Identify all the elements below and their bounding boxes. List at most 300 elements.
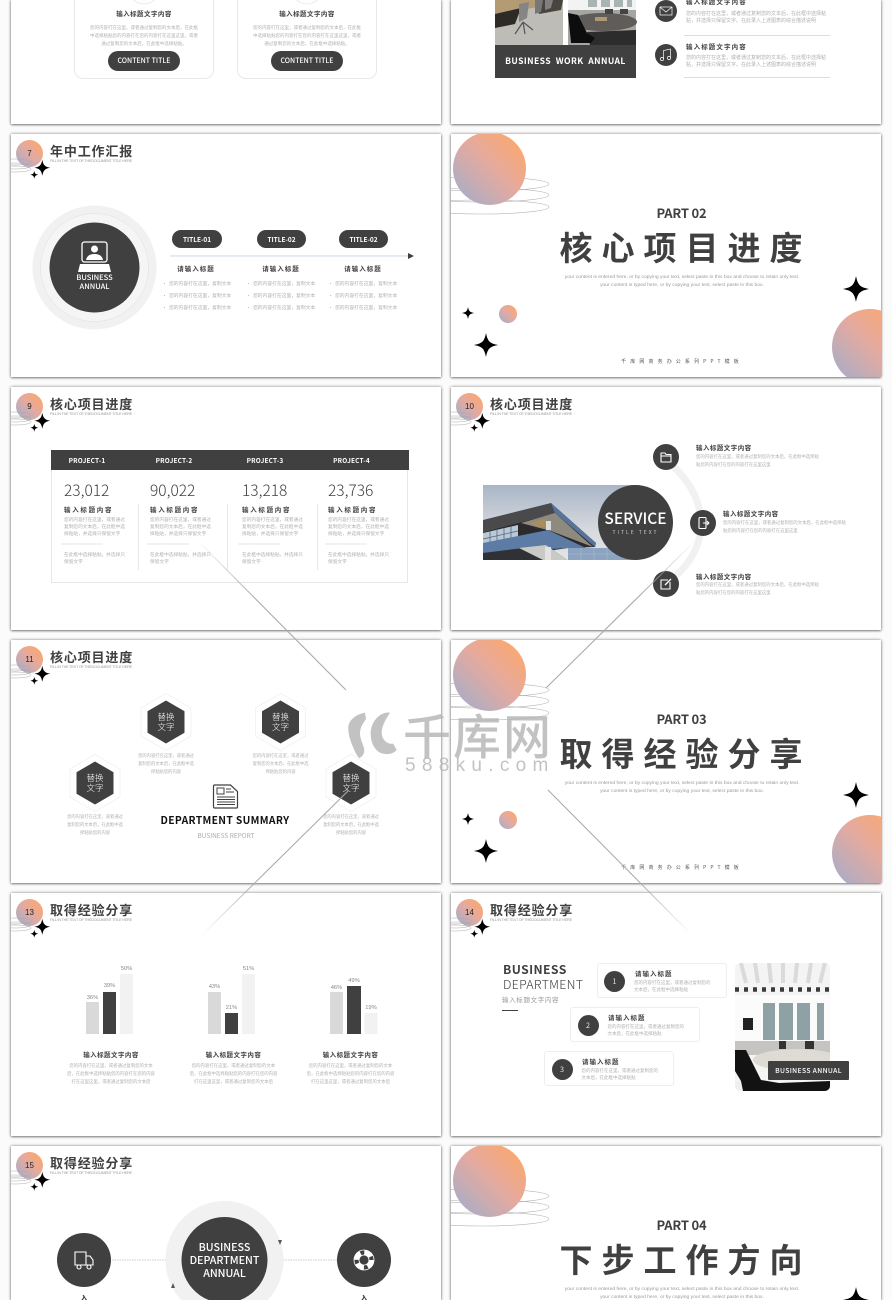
- text block: music body: 您的内容打在这里，或者通过复制您的文本后，在此框中选择粘: [686, 54, 826, 61]
- page number: 9: [27, 402, 32, 411]
- hexagons: [0, 640, 430, 883]
- hex label 3: 替换: [86, 772, 104, 784]
- hex body 1: 择粘贴您的内容: [151, 769, 181, 775]
- column 2 note: 在此框中选择粘贴，并选择只: [150, 552, 211, 558]
- number 3: 3: [560, 1064, 564, 1074]
- card body left: 您的内容打在这里，或者通过复制您的文本后，在此框: [90, 25, 198, 31]
- column 3 body: [242, 516, 303, 536]
- column 2 list: [246, 280, 315, 311]
- part description: [482, 780, 882, 796]
- badge text: [76, 272, 113, 292]
- card 3 body: 您的内容打在这里，或者通过复制您的: [582, 1068, 658, 1074]
- heading: 核心项目进度: [50, 394, 133, 413]
- connectors and center ring: [0, 1190, 430, 1300]
- column 2 body: 您的内容打在这里，或者通过: [150, 516, 211, 522]
- subheading: FILL IN THE TEXT OF THEDOCUMENT TITLE HERE: [50, 159, 132, 163]
- project 3 label: PROJECT-3: [247, 454, 283, 464]
- card 2 title: 请输入标题: [608, 1012, 646, 1022]
- subheading: FILL IN THE TEXT OF THEDOCUMENT TITLE HERE: [490, 918, 572, 922]
- header circle: [16, 140, 43, 167]
- header rings and stars: [11, 640, 61, 690]
- slide 6: work annual (cropped): [451, 0, 881, 124]
- text block: mail body: [686, 10, 826, 24]
- hex body 3: 复制您的文本后，在此框中选: [67, 822, 123, 828]
- business annual badge: [32, 206, 156, 330]
- page number: 11: [25, 655, 34, 664]
- star (cropped): [451, 1146, 881, 1300]
- icon: document: [213, 784, 239, 809]
- number 2: 2: [586, 1020, 590, 1030]
- heading: 核心项目进度: [490, 394, 573, 413]
- banner: business work annual: [495, 45, 636, 78]
- header rings and stars: [451, 412, 490, 432]
- icon: envelope: [655, 0, 677, 22]
- table header bar: [51, 450, 409, 470]
- heading: 年中工作汇报: [50, 141, 133, 160]
- small gradient circle: [499, 305, 517, 323]
- hex body 4: [323, 813, 379, 837]
- bar chart 1: 36%: [87, 995, 98, 1001]
- header: [11, 640, 146, 690]
- chart 1 body: [67, 1062, 155, 1087]
- part description: your content is typed here, or by copying your text, select paste in this box.: [600, 1295, 764, 1300]
- number 1: 1: [612, 976, 617, 986]
- summary title: DEPARTMENT SUMMARY: [161, 812, 289, 827]
- column 2 note: [150, 552, 211, 564]
- column 3 note: [242, 552, 303, 564]
- column 1 list: • 您的内容打在这里，复制文本: [162, 280, 231, 287]
- slide 12: PART 03: [451, 640, 881, 883]
- column 2 list: • 您的内容打在这里，复制文本: [246, 304, 315, 311]
- hex body 4: 您的内容打在这里，或者通过: [323, 814, 379, 820]
- photo: building: [482, 485, 639, 560]
- slide 10: service: [451, 387, 881, 630]
- watermark brand text: 千库网: [403, 698, 553, 768]
- column 3 title: 请输入标题: [344, 262, 382, 272]
- card right: [237, 0, 377, 79]
- column 1 number: 23,012: [64, 479, 109, 501]
- bar chart 3: 19%: [365, 1005, 377, 1011]
- watermark url: 588ku.com: [405, 755, 555, 776]
- column 2 body: 复制您的文本后，在此框中选: [150, 524, 211, 530]
- button left: [108, 51, 180, 71]
- column 2 note: 保留文字: [150, 558, 169, 564]
- hex label 4: 替换: [342, 772, 360, 784]
- item 3 body: 您的内容打在这里，或者通过复制您的文本后，在此框中选择粘: [696, 582, 819, 588]
- column 1 note: 在此框中选择粘贴，并选择只: [64, 552, 125, 558]
- icon: lifebuoy: [337, 1233, 391, 1287]
- chart 3 body: [307, 1062, 394, 1087]
- hex body 3: 您的内容打在这里，或者通过: [67, 814, 123, 820]
- chart 3 body: 您的内容打在这里，或者通过复制您的文本: [309, 1063, 392, 1069]
- column 1 list: • 您的内容打在这里，复制文本: [162, 292, 231, 299]
- pill 3: TITLE-02: [349, 234, 378, 244]
- card 2: [570, 1007, 700, 1042]
- page number: 14: [465, 908, 474, 917]
- card 1 body: [634, 980, 710, 994]
- icon: edit: [653, 571, 679, 597]
- page number: 7: [27, 149, 32, 158]
- big gradient circle: [453, 1144, 526, 1217]
- card body left: 通过复制您的文本后，在此框中选择粘贴。: [101, 41, 187, 47]
- text block: music body: 贴，并选择只保留文字。在此录入上述图表的综合描述说明: [686, 61, 816, 68]
- column 2 body: [150, 516, 211, 536]
- page number: 10: [465, 402, 474, 411]
- column 1 body: 复制您的文本后，在此框中选: [64, 524, 125, 530]
- rings: [451, 640, 561, 730]
- column 3 note: 保留文字: [242, 558, 261, 564]
- page number: 15: [25, 1161, 34, 1170]
- chart 2 title: 输入标题文字内容: [206, 1049, 261, 1059]
- arrow timeline: [170, 253, 414, 259]
- slide 7: 年中工作汇报: [11, 134, 441, 377]
- footer caption: 千库网商务办公系列PPT模板: [621, 864, 743, 871]
- part label: PART 04: [657, 1215, 706, 1234]
- part description: your content is typed here, or by copying your text, select paste in this box.: [600, 283, 764, 288]
- hex label 2: [272, 712, 289, 732]
- column 3 list: • 您的内容打在这里，复制文本: [328, 304, 397, 311]
- pill 1: TITLE-01: [183, 234, 211, 244]
- item 2 body: 贴您的内容打在您的内容打在这里这里: [723, 528, 798, 534]
- column 2 body: 择粘贴，并选择只保留文字: [150, 530, 206, 536]
- divider 1: [684, 35, 830, 36]
- part label: PART 03: [657, 709, 706, 728]
- column 4 body: 复制您的文本后，在此框中选: [328, 524, 389, 530]
- heading: business: BUSINESS: [503, 960, 567, 978]
- service label: SERVICE: [604, 507, 667, 529]
- hex body 1: 您的内容打在这里，或者通过: [138, 753, 194, 759]
- item 1 title: 输入标题文字内容: [696, 442, 752, 452]
- hex label 1: 文字: [157, 720, 175, 732]
- card 2 body: 文本后，在此框中选择粘贴: [608, 1030, 662, 1036]
- header circle: [16, 646, 43, 673]
- hex label 2: 替换: [272, 710, 289, 722]
- slide 11: department summary: [11, 640, 441, 883]
- column 3 note: 在此框中选择粘贴，并选择只: [242, 552, 303, 558]
- hex body 3: [67, 813, 123, 837]
- chart 2 body: 后，在此框中选择粘贴您的内容打在您的内容: [190, 1071, 277, 1077]
- chart 2 body: 打在这里这里，或者通过复制您的文本后: [194, 1079, 273, 1085]
- page number: 13: [25, 908, 34, 917]
- column 3 body: 复制您的文本后，在此框中选: [242, 524, 303, 530]
- banner: business work annual: BUSINESS WORK ANNUAL: [505, 55, 626, 67]
- pill 2: TITLE-02: [267, 234, 296, 244]
- center label: ANNUAL: [203, 1266, 246, 1280]
- hex body 3: 择粘贴您的内容: [80, 830, 110, 836]
- photos: office: [495, 0, 637, 45]
- pill 2: [257, 230, 306, 248]
- accent line: [502, 1010, 518, 1011]
- header rings and stars: [11, 158, 50, 179]
- bar chart 2: 43%: [209, 984, 220, 990]
- header: [11, 893, 146, 943]
- item 2 body: 您的内容打在这里，或者通过复制您的文本后，在此框中选择粘: [723, 520, 846, 526]
- slide 15: process circles (cropped): [11, 1146, 441, 1300]
- hex label 2: 文字: [272, 720, 289, 732]
- pill 3: [339, 230, 388, 248]
- summary subtitle: BUSINESS REPORT: [197, 830, 255, 840]
- part description: your content is entered here, or by copying your text, select paste in this box and choose to retain only text.: [565, 1287, 799, 1292]
- center label: DEPARTMENT: [190, 1252, 259, 1268]
- hex body 2: 择粘贴您的内容: [265, 769, 296, 775]
- icon: phone: [690, 510, 716, 536]
- column 1 title: 请输入标题: [177, 262, 215, 272]
- bar chart 1: 39%: [104, 983, 115, 989]
- card body right: 您的内容打在这里，或者通过复制您的文本后，在此框: [253, 25, 361, 31]
- chart 1 title: 输入标题文字内容: [83, 1049, 139, 1059]
- photo label: [768, 1061, 849, 1080]
- card body right: 中选择粘贴您的内容打在您的内容打在这里这里，或者: [253, 33, 361, 39]
- rings: [451, 177, 550, 214]
- column 3 list: • 您的内容打在这里，复制文本: [328, 292, 397, 299]
- service circle: [598, 485, 673, 560]
- chart 3 body: 打在这里这里，或者通过复制您的文本后: [311, 1079, 390, 1085]
- heading: 取得经验分享: [490, 900, 573, 919]
- hex body 1: 复制您的文本后，在此框中选: [138, 761, 194, 767]
- icon: folder: [653, 444, 679, 470]
- bar chart 3: 49%: [348, 978, 360, 984]
- card body left: 中选择粘贴您的内容打在您的内容打在这里这里，或者: [90, 33, 198, 39]
- hex body 2: 复制您的文本后，在此框中选: [253, 761, 308, 767]
- subheading: FILL IN THE TEXT OF THEDOCUMENT TITLE HERE: [50, 412, 132, 416]
- footer caption: 千库网商务办公系列PPT模板: [621, 358, 743, 365]
- bar chart 3: 46%: [331, 985, 342, 991]
- hex body 1: [138, 752, 194, 776]
- rings: [451, 1146, 561, 1236]
- column 1 list: • 您的内容打在这里，复制文本: [162, 304, 231, 311]
- chart 2 body: [190, 1062, 277, 1087]
- heading: department: DEPARTMENT: [503, 974, 583, 993]
- item 2 title: 输入标题文字内容: [723, 508, 779, 518]
- bar chart 2: [202, 960, 262, 1036]
- badge text: BUSINESS: [76, 272, 113, 283]
- header rings and stars: [11, 412, 50, 432]
- center label: BUSINESS: [199, 1240, 250, 1254]
- slide 5: content cards (cropped): [11, 0, 441, 124]
- badge text: ANNUAL: [80, 281, 109, 292]
- number 1: [604, 970, 625, 992]
- text block: mail body: 贴，并选择只保留文字。在此录入上述图表的综合描述说明: [686, 17, 816, 24]
- number 3: [552, 1058, 572, 1080]
- hex label 3: [86, 772, 104, 792]
- hex label 1: 替换: [157, 710, 175, 722]
- column 1 body: [64, 516, 125, 536]
- heading: 取得经验分享: [50, 1153, 133, 1172]
- column 2 title: 请输入标题: [262, 262, 300, 272]
- hex body 4: 复制您的文本后，在此框中选: [323, 822, 379, 828]
- part description: your content is entered here, or by copying your text, select paste in this box and choose to retain only text.: [565, 781, 799, 786]
- divider 2: [684, 77, 830, 78]
- service sublabel: TITLE TEXT: [613, 528, 658, 536]
- subheading: FILL IN THE TEXT OF THEDOCUMENT TITLE HERE: [50, 918, 132, 922]
- card body right: [253, 24, 361, 47]
- header rings and stars: [11, 893, 61, 943]
- column 1 note: 保留文字: [64, 558, 83, 564]
- card 3 body: 文本后，在此框中选择粘贴: [582, 1074, 636, 1080]
- arc: [671, 465, 703, 578]
- column 1 body: 择粘贴，并选择只保留文字: [64, 530, 120, 536]
- slide 13: bar charts: [11, 893, 441, 1136]
- header: [11, 393, 133, 432]
- part title: 下步工作方向: [560, 1234, 812, 1282]
- hex body 4: 择粘贴您的内容: [336, 830, 366, 836]
- photo label: BUSINESS ANNUAL: [775, 1065, 842, 1075]
- bar chart 2: 21%: [226, 1005, 237, 1011]
- subheading: FILL IN THE TEXT OF THEDOCUMENT TITLE HERE: [490, 412, 572, 416]
- project 2 label: PROJECT-2: [156, 454, 192, 464]
- chart 1 body: 后，在此框中选择粘贴您的内容打在您的内容: [67, 1071, 155, 1077]
- slide 16: PART 04 (cropped): [451, 1146, 881, 1300]
- column 1 title: 输入标题内容: [64, 504, 113, 514]
- column 4 number: 23,736: [328, 479, 373, 501]
- hex body 2: 您的内容打在这里，或者通过: [253, 753, 308, 759]
- hex label 1: [157, 712, 175, 732]
- card 1 body: 您的内容打在这里，或者通过复制您的: [634, 980, 710, 986]
- hex label 3: 文字: [86, 782, 104, 794]
- part description: your content is entered here, or by copying your text, select paste in this box and choose to retain only text.: [565, 275, 799, 280]
- column 2 number: 90,022: [150, 479, 195, 501]
- card 3 title: 请输入标题: [582, 1056, 620, 1066]
- item 1 body: 贴您的内容打在您的内容打在这里这里: [696, 462, 771, 468]
- subheading: FILL IN THE TEXT OF THEDOCUMENT TITLE HERE: [50, 1171, 132, 1175]
- column 3 title: 输入标题内容: [242, 504, 291, 514]
- card body right: 通过复制您的文本后，在此框中选择粘贴。: [264, 41, 350, 47]
- project 4 label: PROJECT-4: [333, 454, 370, 464]
- heading: 核心项目进度: [50, 647, 133, 666]
- column 3 list: • 您的内容打在这里，复制文本: [328, 280, 397, 287]
- subheading: FILL IN THE TEXT OF THEDOCUMENT TITLE HERE: [50, 665, 132, 669]
- watermark logo: [348, 712, 398, 759]
- column 3 body: 您的内容打在这里，或者通过: [242, 516, 303, 522]
- pill 1: [172, 230, 222, 248]
- number 2: [578, 1014, 598, 1036]
- column 2 title: 输入标题内容: [150, 504, 199, 514]
- item 1 body: [696, 454, 819, 468]
- card body left: [90, 24, 198, 47]
- icon arcs on top of cards: [134, 0, 318, 4]
- column 4 note: 在此框中选择粘贴，并选择只: [328, 552, 389, 558]
- small gradient circle: [499, 811, 517, 829]
- column 1 body: 您的内容打在这里，或者通过: [64, 516, 125, 522]
- chart 3 title: 输入标题文字内容: [323, 1049, 378, 1059]
- card 1: [597, 963, 727, 998]
- part description: [482, 1286, 882, 1300]
- slide 14: business department: [451, 893, 881, 1136]
- header circle: [16, 899, 43, 926]
- item 3 title: 输入标题文字内容: [696, 570, 752, 580]
- part description: your content is typed here, or by copying your text, select paste in this box.: [600, 789, 764, 794]
- text block: music body: [686, 54, 826, 68]
- item 3 body: 贴您的内容打在您的内容打在这里这里: [696, 590, 771, 596]
- part description: [564, 274, 799, 288]
- chart 1 body: 打在这里这里，或者通过复制您的文本后: [71, 1079, 151, 1085]
- header rings and stars: [451, 893, 501, 943]
- card 2 body: [608, 1024, 684, 1038]
- column 2 list: • 您的内容打在这里，复制文本: [246, 292, 315, 299]
- hex body 2: [253, 752, 308, 776]
- header circle: [16, 1152, 43, 1179]
- column 2 list: • 您的内容打在这里，复制文本: [246, 280, 315, 287]
- card 3: [544, 1051, 674, 1086]
- bar chart 1: 50%: [121, 966, 132, 972]
- card 1 body: 文本后，在此框中选择粘贴: [634, 986, 688, 992]
- header rings and stars: [11, 1146, 61, 1196]
- column 3 number: 13,218: [242, 479, 287, 501]
- corner gradient circle: [832, 309, 892, 385]
- chart 1 body: 您的内容打在这里，或者通过复制您的文本: [69, 1063, 153, 1069]
- button right: CONTENT TITLE: [280, 56, 333, 66]
- column 1 note: [64, 552, 125, 564]
- item 2 body: [723, 520, 846, 534]
- column 4 note: [328, 552, 389, 564]
- column 1 list: [162, 280, 231, 311]
- stars: [451, 640, 881, 883]
- header circle: [456, 393, 483, 420]
- corner gradient circle: [832, 815, 892, 891]
- column 4 body: 择粘贴，并选择只保留文字: [328, 530, 384, 536]
- item 3 body: [696, 582, 819, 596]
- chart 3 body: 后，在此框中选择粘贴您的内容打在您的内容: [307, 1071, 394, 1077]
- card 1 title: 请输入标题: [635, 968, 672, 978]
- column 4 note: 保留文字: [328, 558, 347, 564]
- stars: [462, 276, 869, 357]
- column dividers: [61, 504, 367, 570]
- card title left: 输入标题文字内容: [116, 8, 172, 18]
- column 3 list: [328, 280, 397, 311]
- project 1 label: PROJECT-1: [69, 454, 105, 464]
- subheading: 输入标题文字内容: [502, 994, 559, 1004]
- part title: 取得经验分享: [560, 728, 812, 776]
- column 3 body: 择粘贴，并选择只保留文字: [242, 530, 298, 536]
- bar chart 3: [324, 960, 384, 1036]
- bar chart 1: [80, 960, 140, 1036]
- card 2 body: 您的内容打在这里，或者通过复制您的: [608, 1024, 684, 1030]
- header: [451, 893, 586, 943]
- item 1 body: 您的内容打在这里，或者通过复制您的文本后，在此框中选择粘: [696, 454, 819, 460]
- button left: CONTENT TITLE: [118, 56, 170, 66]
- icon: truck: [57, 1233, 111, 1287]
- slide 9: project table: [11, 387, 441, 630]
- card title right: 输入标题文字内容: [279, 8, 335, 18]
- part label: PART 02: [657, 203, 706, 222]
- header circle: [16, 393, 43, 420]
- header: [451, 393, 573, 432]
- table frame: [51, 450, 408, 583]
- header: [11, 1146, 146, 1196]
- text block: music title: 输入标题文字内容: [686, 41, 747, 51]
- column 4 title: 输入标题内容: [328, 504, 377, 514]
- hex label 4: 文字: [342, 782, 360, 794]
- heading: 取得经验分享: [50, 900, 133, 919]
- bar chart 2: 51%: [243, 966, 254, 972]
- photo: white meeting room: [735, 963, 830, 1091]
- hex label 4: [342, 772, 360, 792]
- column 4 body: [328, 516, 389, 536]
- chart 2 body: 您的内容打在这里，或者通过复制您的文本: [192, 1063, 275, 1069]
- center label: [190, 1240, 259, 1280]
- button right: [271, 51, 343, 71]
- icon: music: [655, 44, 677, 66]
- part title: 核心项目进度: [560, 222, 812, 270]
- card 3 body: [582, 1068, 658, 1082]
- column 4 body: 您的内容打在这里，或者通过: [328, 516, 389, 522]
- header circle: [456, 899, 483, 926]
- text block: mail body: 您的内容打在这里，或者通过复制您的文本后，在此框中选择粘: [686, 10, 826, 17]
- header: [11, 140, 133, 179]
- big gradient circle: [453, 638, 526, 711]
- card left: [74, 0, 214, 79]
- big gradient circle: [453, 132, 526, 205]
